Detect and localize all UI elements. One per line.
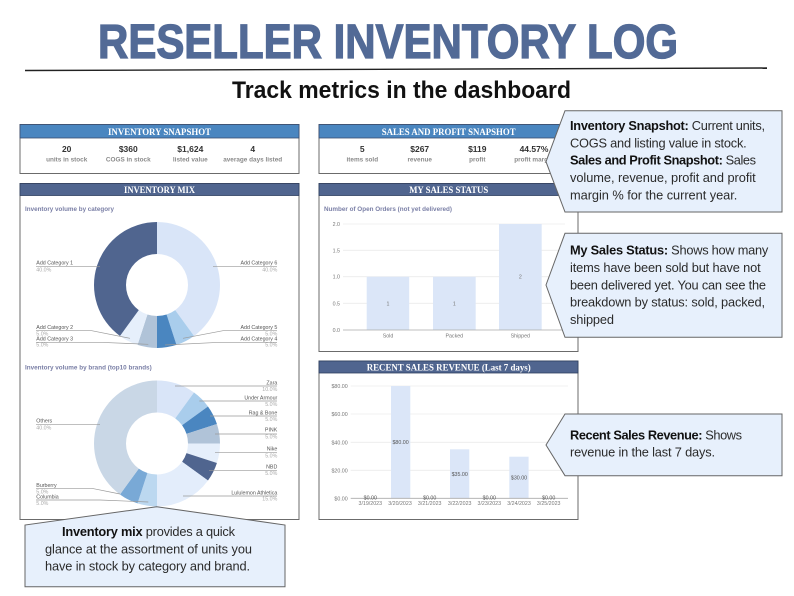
heading: inventory snapshot	[20, 124, 299, 138]
donut labels: brand: Others	[36, 419, 53, 425]
metric: COGS in stock: COGS in stock	[106, 156, 151, 164]
bar chart: open orders	[333, 222, 565, 340]
subtitle: Track metrics in the dashboard	[232, 77, 571, 104]
chart title: by category: Inventory volume by category	[25, 206, 114, 213]
heading: inventory snapshot: INVENTORY SNAPSHOT	[108, 127, 211, 137]
donut labels: brand: Nike	[267, 447, 277, 453]
callout: snapshots: margin % for the current year.	[570, 187, 737, 202]
donut labels: brand: 5.0%	[265, 454, 278, 460]
callout: inventory mix	[25, 507, 285, 587]
title: RESELLER INVENTORY LOG	[98, 16, 678, 69]
callout: recent sales revenue: revenue in the last 7 days.	[570, 445, 715, 460]
heading: recent sales revenue: RECENT SALES REVENUE (Last 7 days)	[367, 362, 531, 372]
donut labels: brand: 5.0%	[36, 501, 49, 507]
callout: my sales status	[546, 233, 782, 337]
bar chart: open orders: 1.5	[333, 248, 340, 254]
bar chart: revenue: $0.00	[334, 496, 348, 502]
bar chart: revenue: $60.00	[331, 412, 348, 418]
callout: snapshots	[546, 111, 782, 212]
donut labels: brand: 10.0%	[262, 387, 278, 393]
heading: my sales status	[319, 184, 578, 196]
metric: profit: $119	[468, 144, 487, 154]
bar chart: open orders: 1	[453, 301, 456, 307]
metric: items sold	[346, 144, 378, 164]
bar chart: revenue: $0.00	[483, 496, 496, 502]
donut labels: brand: 40.0%	[36, 426, 52, 432]
metric: units in stock: 20	[62, 144, 72, 154]
panel: inventory mix	[20, 184, 299, 520]
donut labels: brand: NBD	[266, 465, 277, 471]
callout: inventory mix: glance at the assortment of units you	[45, 541, 252, 556]
donut labels: category: Add Category 2	[36, 325, 73, 331]
bar chart: revenue: $30.00	[511, 476, 527, 482]
donut labels: brand: Lululemon Athletica	[231, 490, 277, 496]
bar chart: revenue: $0.00	[423, 496, 436, 502]
donut labels: brand: 5.0%	[265, 402, 278, 408]
bar chart: revenue: $80.00	[331, 384, 348, 390]
callout: snapshots: volume, revenue, profit and profit	[570, 170, 756, 185]
metric: profit margin: 44.57%	[520, 144, 549, 154]
donut labels: category: 5.0%	[265, 343, 278, 349]
callout: my sales status: items have been sold but have not	[570, 260, 761, 275]
bar chart: open orders: Packed	[445, 334, 463, 340]
heading: recent sales revenue	[319, 361, 578, 373]
bar chart: revenue: $0.00	[542, 496, 555, 502]
donut labels: category: 40.0%	[36, 268, 52, 274]
metric: COGS in stock	[106, 144, 151, 164]
metric: units in stock	[46, 144, 88, 164]
donut labels: category: Add Category 4	[240, 336, 277, 342]
donut labels: category: Add Category 1	[36, 261, 73, 267]
bar chart: revenue	[331, 384, 568, 507]
metric: listed value	[173, 144, 208, 164]
heading: sales and profit snapshot: SALES AND PROFIT SNAPSHOT	[382, 127, 516, 137]
metric: average days listed: 4	[250, 144, 255, 154]
bar chart: open orders: 2	[519, 275, 522, 281]
callout: recent sales revenue	[546, 414, 782, 476]
bar chart: revenue: $20.00	[331, 468, 348, 474]
donut labels: brand: 5.0%	[265, 434, 278, 440]
bar chart: revenue: $35.00	[452, 472, 468, 478]
bar chart: open orders: 1.0	[333, 275, 340, 281]
donut labels: brand	[36, 381, 278, 507]
chart title: open orders: Number of Open Orders (not yet delivered)	[324, 206, 452, 213]
donut labels: brand: 5.0%	[265, 471, 278, 477]
metric: listed value: $1,624	[177, 144, 204, 154]
donut labels: category: Add Category 5	[240, 325, 277, 331]
callout: snapshots: Sales and Profit Snapshot: Sales	[570, 153, 756, 168]
bar chart: open orders: Sold	[383, 334, 393, 340]
donut labels: brand: 5.0%	[265, 417, 278, 423]
bar chart: revenue: 3/20/2023	[388, 501, 412, 507]
callout: my sales status: been delivered yet. You can see the	[570, 277, 766, 292]
panel: sales and profit snapshot	[319, 124, 578, 174]
callout: my sales status: breakdown by status: sold, packed,	[570, 295, 765, 310]
bar chart: revenue: $80.00	[392, 440, 409, 446]
callout: snapshots: COGS and listing value in stock.	[570, 135, 747, 150]
donut labels: brand: Rag & Bone	[249, 410, 277, 416]
panel: recent sales revenue	[319, 361, 578, 520]
donut labels: brand: PINK	[265, 428, 278, 434]
callout: my sales status: My Sales Status: Shows how many	[570, 243, 769, 258]
metric: items sold: 5	[360, 144, 365, 154]
bar chart: revenue: $0.00	[364, 496, 377, 502]
donut labels: category: Add Category 3	[36, 336, 73, 342]
callout: inventory mix: have in stock by category and brand.	[45, 559, 250, 574]
donut labels: category: 40.0%	[262, 268, 278, 274]
bar chart: open orders: Shipped	[511, 334, 530, 340]
bar chart: revenue: 3/21/2023	[418, 501, 442, 507]
heading: my sales status: MY SALES STATUS	[409, 185, 488, 195]
metric: profit	[468, 144, 487, 164]
callout: inventory mix: Inventory mix provides a quick	[62, 524, 236, 539]
donut chart: category	[94, 222, 220, 348]
bar chart: revenue: 3/19/2023	[359, 501, 382, 507]
panel: inventory snapshot	[20, 124, 299, 174]
metric: profit margin	[514, 144, 554, 164]
donut labels: category: 5.0%	[36, 343, 49, 349]
heading: inventory mix: INVENTORY MIX	[124, 185, 195, 195]
donut labels: brand: Under Armour	[244, 395, 278, 401]
metric: revenue: $267	[410, 144, 429, 154]
donut labels: category: 5.0%	[265, 332, 278, 338]
donut labels: category	[36, 261, 278, 349]
metric: COGS in stock: $360	[119, 144, 138, 154]
bar chart: open orders: 1	[387, 301, 390, 307]
chart title: by brand: Inventory volume by brand (top10 brands)	[25, 365, 152, 372]
bar chart: revenue: 3/24/2023	[507, 501, 531, 507]
bar chart: revenue: 3/23/2023	[478, 501, 501, 507]
bar chart: revenue: 3/25/2023	[537, 501, 561, 507]
donut chart: brand	[94, 380, 220, 506]
donut labels: category: Add Category 6	[240, 261, 277, 267]
donut labels: category: 5.0%	[36, 332, 49, 338]
metric: units in stock: units in stock	[46, 156, 88, 164]
bar chart: revenue: $40.00	[331, 440, 348, 446]
bar chart: open orders: 0.0	[333, 328, 340, 334]
metric: revenue	[407, 144, 432, 164]
bar chart: open orders: 0.5	[333, 301, 340, 307]
metric: profit: profit	[469, 156, 486, 164]
callout: my sales status: shipped	[570, 312, 614, 327]
heading: sales and profit snapshot	[319, 124, 578, 138]
metric: revenue: revenue	[407, 156, 432, 164]
donut labels: brand: Burberry	[36, 483, 57, 489]
metric: average days listed	[223, 144, 282, 164]
bar chart: revenue: 3/22/2023	[448, 501, 472, 507]
metric: listed value: listed value	[173, 156, 208, 164]
metric: items sold: items sold	[346, 156, 378, 164]
metric: profit margin: profit margin	[514, 156, 554, 164]
donut labels: brand: Zara	[266, 381, 277, 387]
heading: inventory mix	[20, 184, 299, 196]
bar chart: open orders: 2.0	[333, 222, 340, 228]
donut labels: brand: 15.0%	[262, 497, 278, 503]
metric: average days listed: average days listed	[223, 156, 282, 164]
donut labels: brand: Columbia	[36, 494, 59, 500]
callout: snapshots: Inventory Snapshot: Current units,	[570, 118, 765, 133]
donut labels: brand: 5.0%	[36, 490, 49, 496]
callout: recent sales revenue: Recent Sales Revenue: Shows	[570, 427, 742, 442]
panel: my sales status	[319, 184, 578, 352]
